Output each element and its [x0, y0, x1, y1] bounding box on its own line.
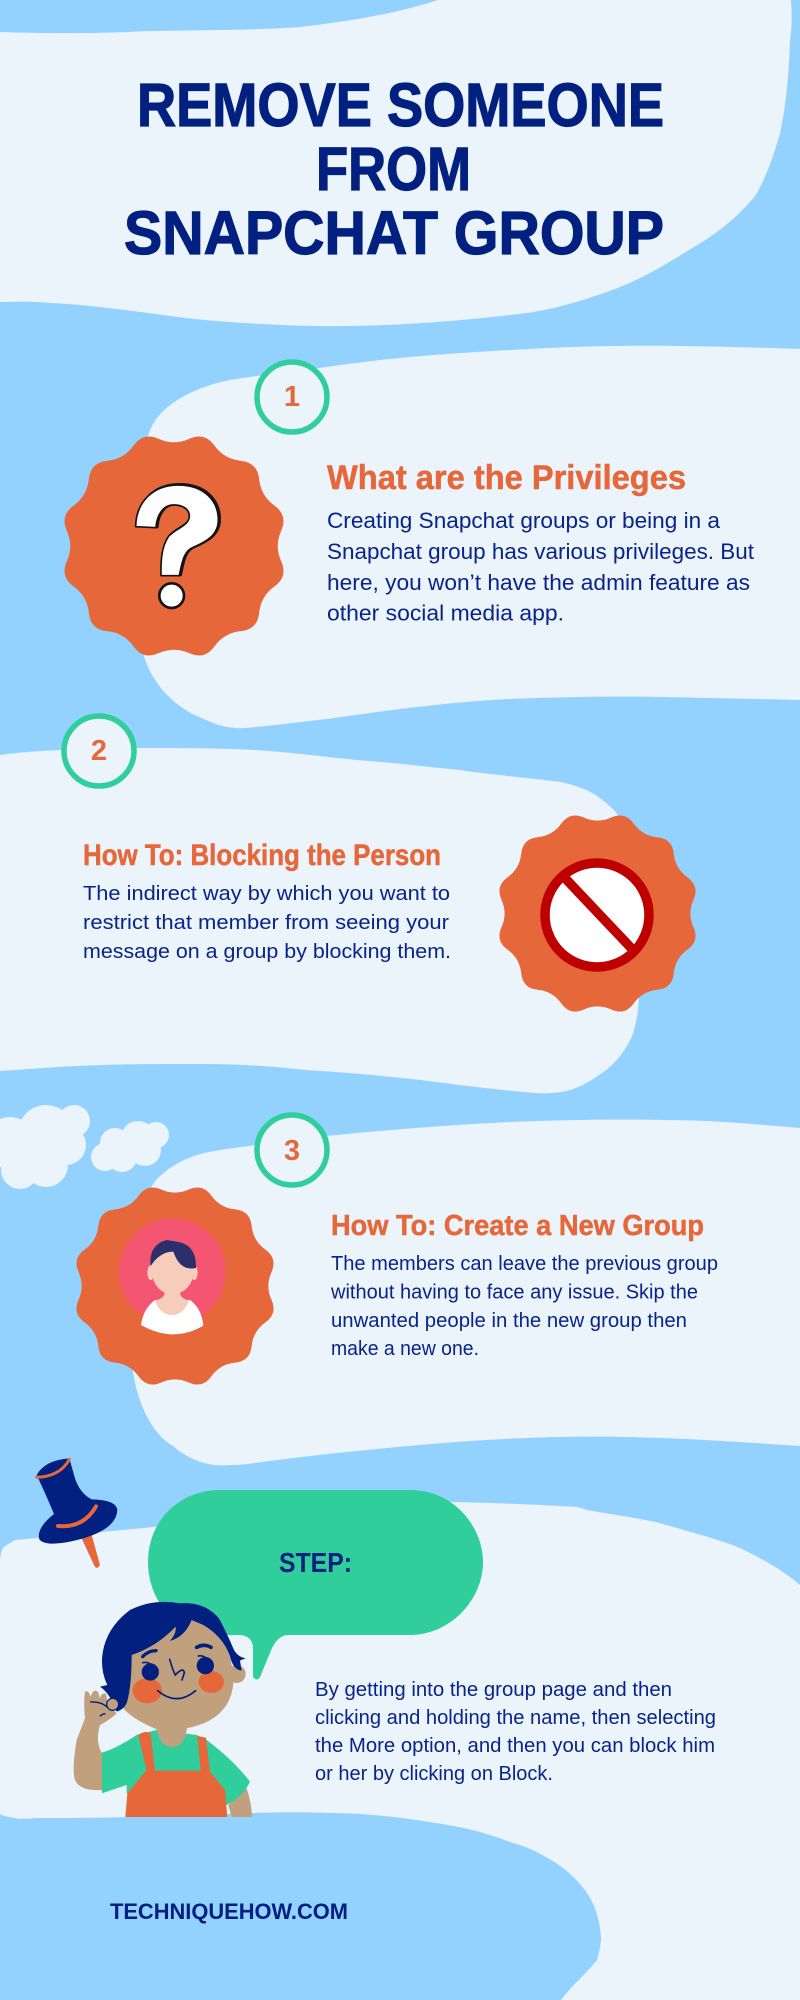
badge: section number 2: [64, 716, 134, 786]
t-shirt: [102, 1730, 250, 1805]
text block: step body: [315, 1679, 716, 1785]
text block: section 2 body: [83, 882, 451, 963]
title: REMOVE SOMEONE: [137, 71, 664, 140]
panel: section 3 background: [130, 1120, 800, 1465]
badge: section number 2: 2: [91, 735, 107, 767]
cheeks: [133, 1678, 162, 1703]
badge: section number 3: 3: [284, 1135, 300, 1167]
decoration: clouds: [0, 1105, 169, 1189]
panel: section 1 background: [132, 346, 800, 728]
text block: section 2 body: message on a group by blocking them.: [83, 940, 451, 963]
panel: step background: [0, 1501, 800, 2000]
head: [120, 1617, 233, 1729]
badge: question mark: [65, 437, 283, 655]
icon: no entry sign: [545, 863, 649, 967]
character: waving child: [74, 1602, 252, 1817]
hair: [100, 1602, 246, 1712]
icon: person: [119, 1218, 226, 1334]
text block: section 3 body: unwanted people in the new group then: [331, 1310, 687, 1332]
text block: section 1 body: Snapchat group has various privileges. But: [327, 539, 754, 564]
text block: step body: or her by clicking on Block.: [315, 1763, 553, 1785]
neck: [157, 1723, 187, 1747]
heading: blocking the person: How To: Blocking the Person: [83, 839, 441, 872]
badge: person avatar: [76, 1187, 274, 1385]
text block: section 3 body: [330, 1253, 718, 1360]
text block: section 3 body: make a new one.: [331, 1338, 479, 1360]
title: SNAPCHAT GROUP: [124, 199, 664, 268]
text block: section 3 body: without having to face any issue. Skip the: [330, 1282, 698, 1304]
text block: step body: By getting into the group page and then: [315, 1679, 672, 1701]
panel: title background: [0, 0, 792, 326]
text block: section 2 body: restrict that member from seeing your: [83, 911, 449, 934]
text block: section 1 body: Creating Snapchat groups or being in a: [327, 508, 721, 533]
overalls: [125, 1732, 227, 1817]
text block: section 2 body: The indirect way by which you want to: [83, 882, 450, 905]
eyes: [142, 1663, 159, 1681]
title: [124, 71, 664, 268]
badge: section number 1: 1: [284, 381, 300, 413]
face lines: [91, 1645, 211, 1716]
heading: create a new group: How To: Create a New Group: [331, 1210, 704, 1242]
text block: section 1 body: here, you won’t have the admin feature as: [327, 570, 750, 595]
arm and hand: [74, 1691, 117, 1790]
text block: section 3 body: The members can leave the previous group: [331, 1253, 718, 1275]
speech bubble: [148, 1490, 483, 1680]
icon: push pin: [37, 1458, 117, 1568]
icon: question mark: [136, 484, 220, 608]
panel: section 2 background: [0, 748, 640, 1093]
text block: section 1 body: [327, 508, 754, 626]
heading: what are the privileges: What are the Privileges: [327, 459, 686, 497]
step label: STEP:: [279, 1547, 352, 1578]
badge: prohibition sign: [499, 815, 696, 1012]
title: FROM: [316, 135, 471, 204]
text block: step body: the More option, and then you can block him: [315, 1735, 715, 1757]
text block: step body: clicking and holding the name, then selecting: [315, 1707, 716, 1729]
badge: section number 1: [257, 362, 327, 432]
badge: section number 3: [257, 1115, 327, 1185]
footer: website: TECHNIQUEHOW.COM: [110, 1899, 348, 1924]
text block: section 1 body: other social media app.: [327, 600, 564, 626]
